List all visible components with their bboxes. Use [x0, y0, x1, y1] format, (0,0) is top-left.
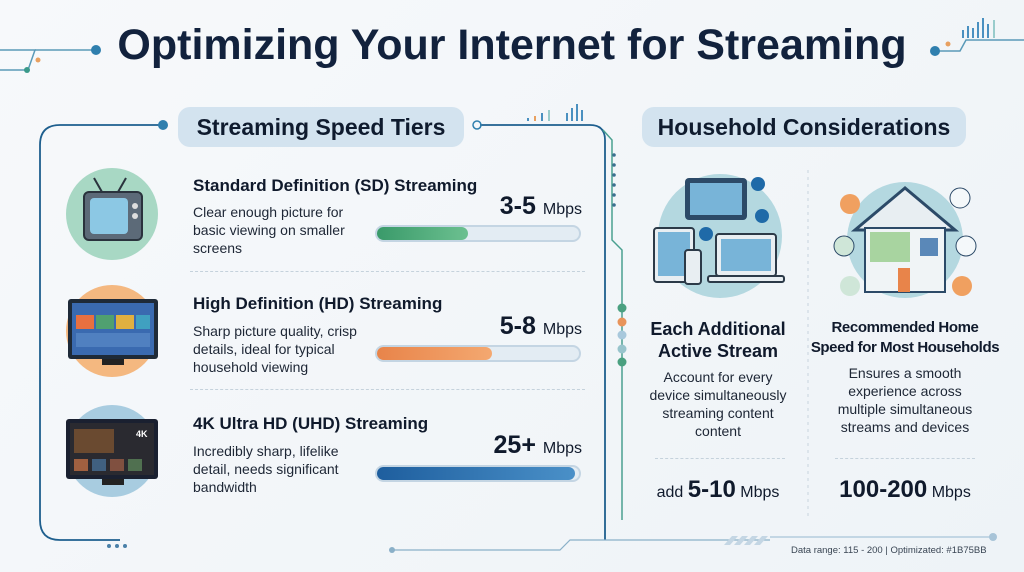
column: recommended: Speed for Most Households — [811, 339, 999, 356]
heading: household considerations: Household Considerations — [658, 114, 950, 140]
text: basic viewing on smaller — [193, 222, 345, 238]
column: additional stream: device simultaneously — [650, 387, 786, 403]
SD text: Standard Definition (SD) Streaming — [193, 176, 477, 195]
icon: house — [834, 182, 976, 298]
column: recommended: streams and devices — [841, 419, 969, 435]
HD speed: 5-8 Mbps — [500, 312, 582, 340]
HD bar — [375, 345, 581, 362]
SD speed: 3-5 Mbps — [500, 192, 582, 220]
icon: old tv — [66, 168, 158, 260]
heading: household considerations — [642, 107, 966, 147]
column: recommended: multiple simultaneous — [838, 401, 972, 417]
icon: HD tv — [66, 285, 158, 377]
HD text: High Definition (HD) Streaming — [193, 294, 442, 313]
column: additional stream: Account for every — [664, 369, 772, 385]
text: bandwidth — [193, 479, 257, 495]
icon: devices — [653, 174, 785, 298]
value: 100-200 Mbps: 100-200 Mbps — [839, 476, 971, 503]
column: recommended — [811, 319, 999, 435]
column: additional stream: streaming content — [662, 405, 774, 421]
text: Incredibly sharp, lifelike — [193, 443, 339, 459]
column: additional stream: Each Additional — [650, 319, 786, 339]
heading: streaming speed tiers: Streaming Speed Tiers — [197, 114, 445, 140]
text: household viewing — [193, 359, 308, 375]
icon: 4K tv: 4K — [136, 429, 148, 439]
row: SD — [60, 165, 590, 265]
value: add 5-10 Mbps: add 5-10 Mbps — [657, 476, 779, 503]
4K speed: 25+ Mbps — [494, 431, 582, 459]
icon: 4K tv — [66, 405, 158, 497]
text: detail, needs significant — [193, 461, 339, 477]
column: additional stream — [650, 319, 786, 439]
text: Clear enough picture for — [193, 204, 343, 220]
column: recommended: Recommended Home — [832, 319, 978, 336]
footer note: Data range: 115 - 200 | Optimizated: #1B75BB — [791, 545, 987, 556]
4K text: 4K Ultra HD (UHD) Streaming — [193, 414, 428, 433]
heading: streaming speed tiers — [178, 107, 464, 147]
panel: streaming speed tiers — [40, 108, 610, 548]
text: Sharp picture quality, crisp — [193, 323, 357, 339]
text: details, ideal for typical — [193, 341, 335, 357]
title: Optimizing Your Internet for Streaming — [117, 21, 907, 69]
4K bar — [375, 465, 581, 482]
text: screens — [193, 240, 242, 256]
column: additional stream: content — [695, 423, 741, 439]
SD bar — [375, 225, 581, 242]
column: additional stream: Active Stream — [658, 341, 778, 361]
column: recommended: experience across — [848, 383, 962, 399]
column: recommended: Ensures a smooth — [849, 365, 961, 381]
